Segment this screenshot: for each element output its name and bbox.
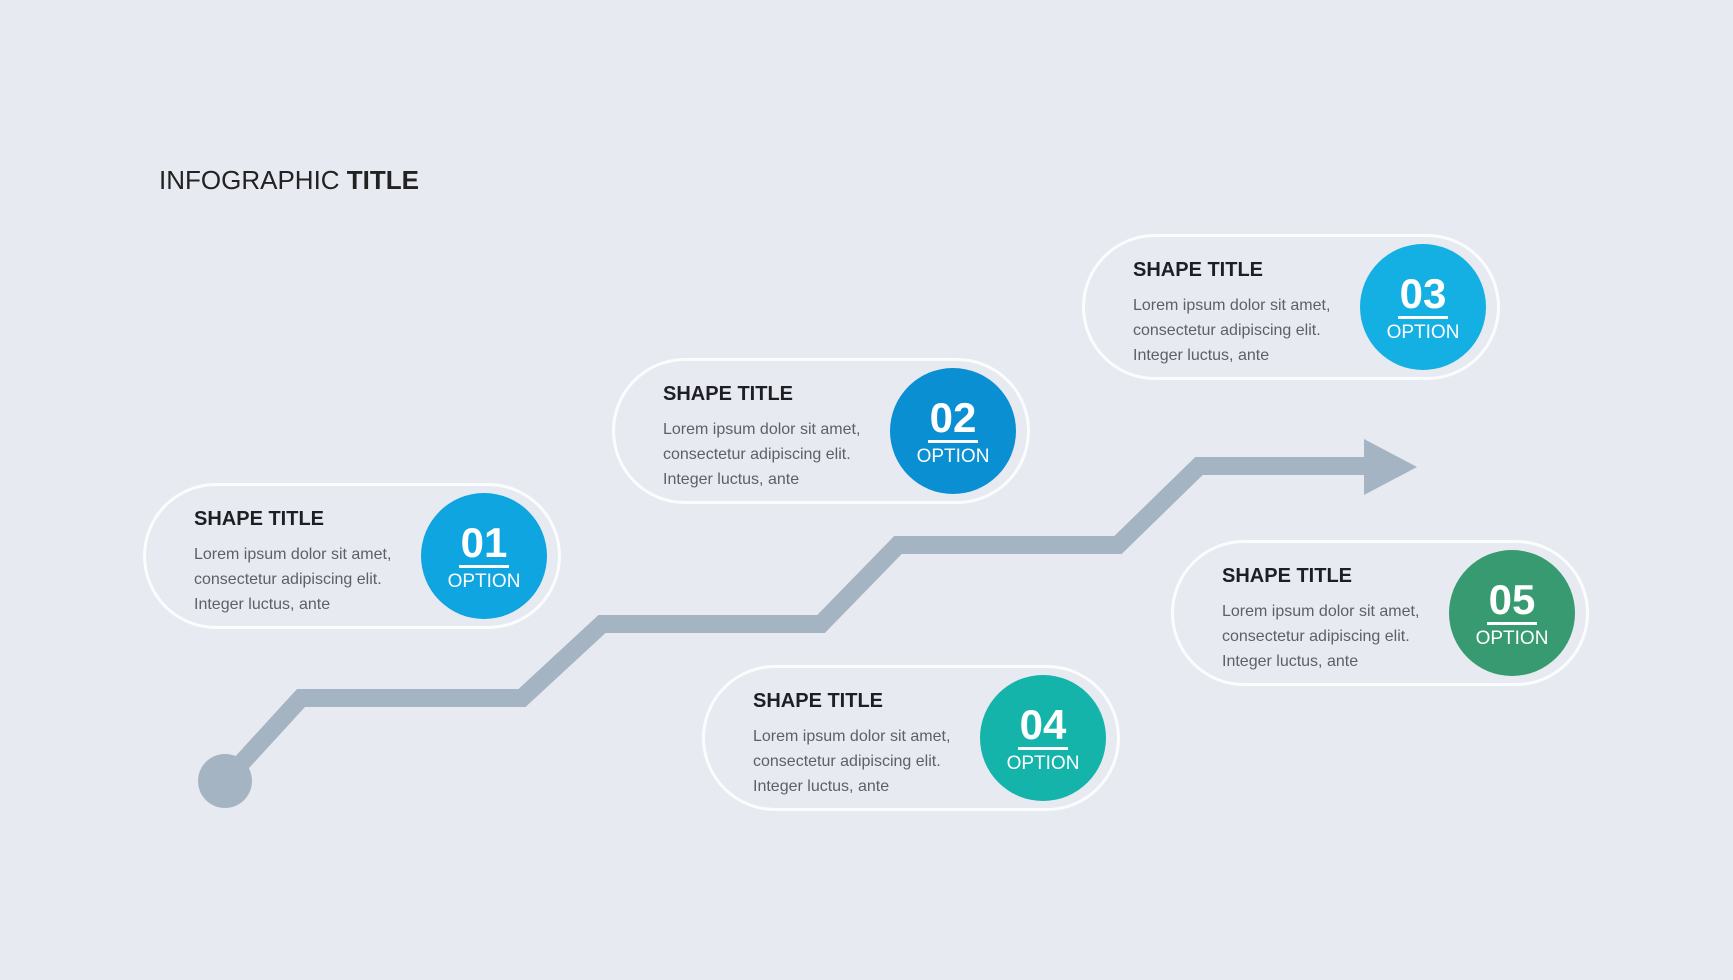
badge 01: 01	[461, 519, 507, 566]
card 05: Integer luctus, ante	[1222, 653, 1358, 670]
badge 05: OPTION	[1476, 628, 1548, 649]
card 01: Lorem ipsum dolor sit amet,	[194, 546, 391, 563]
card 02: SHAPE TITLE	[663, 383, 793, 405]
badge 04: 04	[1020, 701, 1066, 748]
badge 01: OPTION	[448, 571, 520, 592]
badge 03: 03	[1400, 270, 1446, 317]
badge 05	[1449, 550, 1575, 676]
card 01: SHAPE TITLE	[194, 508, 324, 530]
card 03	[1082, 234, 1500, 380]
card 03: Integer luctus, ante	[1133, 347, 1269, 364]
badge 02: OPTION	[917, 446, 989, 467]
card 02: Lorem ipsum dolor sit amet,	[663, 421, 860, 438]
card 04: consectetur adipiscing elit.	[753, 753, 941, 770]
badge 02	[890, 368, 1016, 494]
card 05: SHAPE TITLE	[1222, 565, 1352, 587]
card 01	[143, 483, 561, 629]
card 01: consectetur adipiscing elit.	[194, 571, 382, 588]
title: INFOGRAPHIC TITLE	[159, 165, 419, 195]
card 04: Integer luctus, ante	[753, 778, 889, 795]
badge 03	[1360, 244, 1486, 370]
card 04	[702, 665, 1120, 811]
card 03: SHAPE TITLE	[1133, 259, 1263, 281]
card 04: Lorem ipsum dolor sit amet,	[753, 728, 950, 745]
badge 01	[421, 493, 547, 619]
card 05	[1171, 540, 1589, 686]
card 03: Lorem ipsum dolor sit amet,	[1133, 297, 1330, 314]
card 04: SHAPE TITLE	[753, 690, 883, 712]
card 05: consectetur adipiscing elit.	[1222, 628, 1410, 645]
card 03: consectetur adipiscing elit.	[1133, 322, 1321, 339]
badge 03: OPTION	[1387, 322, 1459, 343]
card 02: Integer luctus, ante	[663, 471, 799, 488]
card 05: Lorem ipsum dolor sit amet,	[1222, 603, 1419, 620]
badge 05: 05	[1489, 576, 1535, 623]
card 01: Integer luctus, ante	[194, 596, 330, 613]
badge 04: OPTION	[1007, 753, 1079, 774]
card 02: consectetur adipiscing elit.	[663, 446, 851, 463]
card 02	[612, 358, 1030, 504]
badge 02: 02	[930, 394, 976, 441]
badge 04	[980, 675, 1106, 801]
